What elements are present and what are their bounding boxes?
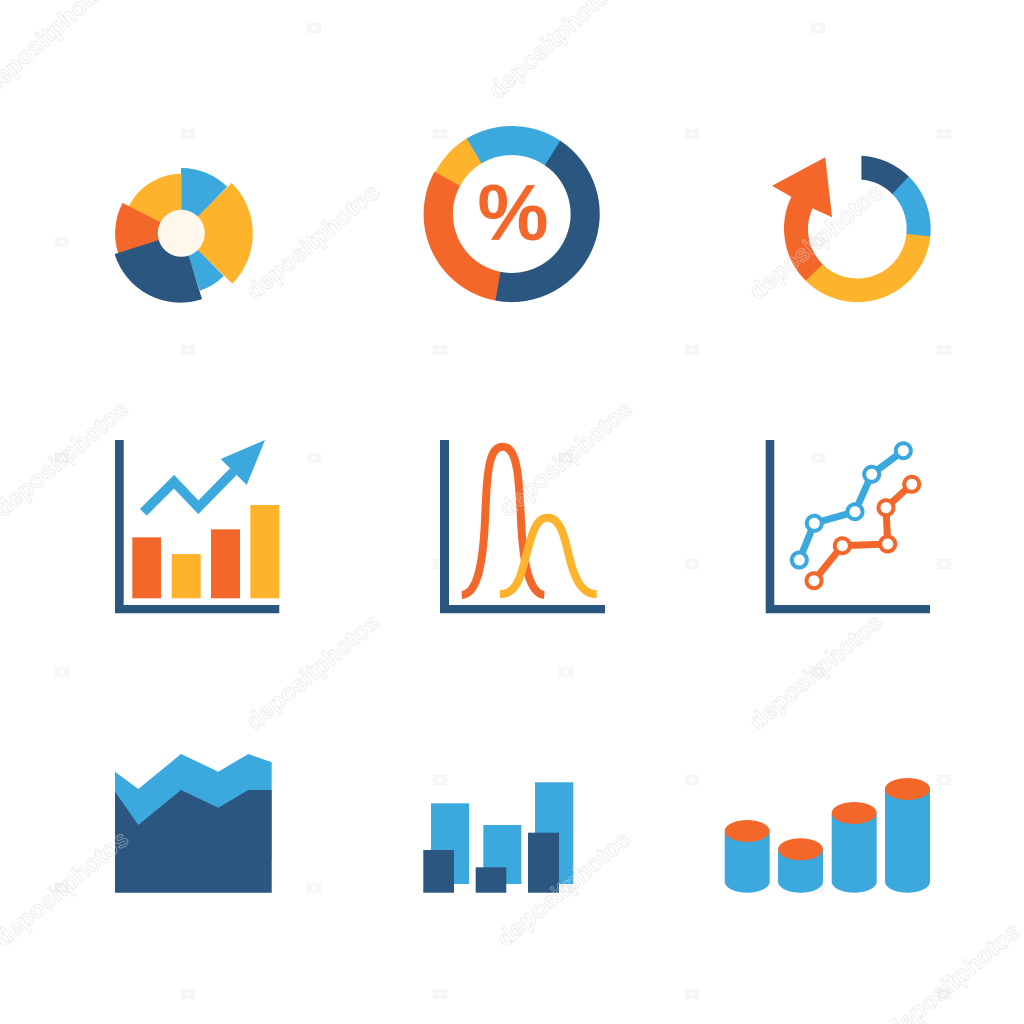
blue series	[792, 443, 911, 568]
bars	[132, 505, 279, 598]
icon: circular arrow ring	[773, 156, 930, 302]
watermark: depositphotos	[241, 179, 385, 306]
icon: exploded pie chart	[115, 168, 253, 302]
watermark: depositphotos	[744, 609, 888, 736]
axes	[115, 440, 279, 613]
icon: cylinder bar chart	[725, 778, 930, 893]
orange bell curve	[462, 447, 544, 595]
icon: line chart with markers	[766, 440, 930, 613]
yellow bell curve	[500, 518, 597, 594]
icon: bar chart with rising arrow	[115, 440, 279, 613]
axes	[766, 440, 930, 613]
icon: percent donut chart	[424, 126, 599, 302]
icon: area chart	[115, 754, 272, 893]
percent sign: %	[477, 168, 549, 257]
watermark: depositphotos	[744, 179, 888, 306]
axes	[440, 440, 605, 613]
icon: bell curves chart	[440, 440, 605, 613]
watermark: depositphotos	[494, 396, 638, 523]
icon: overlapping bar chart	[423, 782, 573, 893]
watermark: depositphotos	[241, 609, 385, 736]
watermark: depositphotos	[492, 826, 636, 953]
rising arrow	[143, 440, 265, 512]
orange series	[806, 477, 919, 588]
